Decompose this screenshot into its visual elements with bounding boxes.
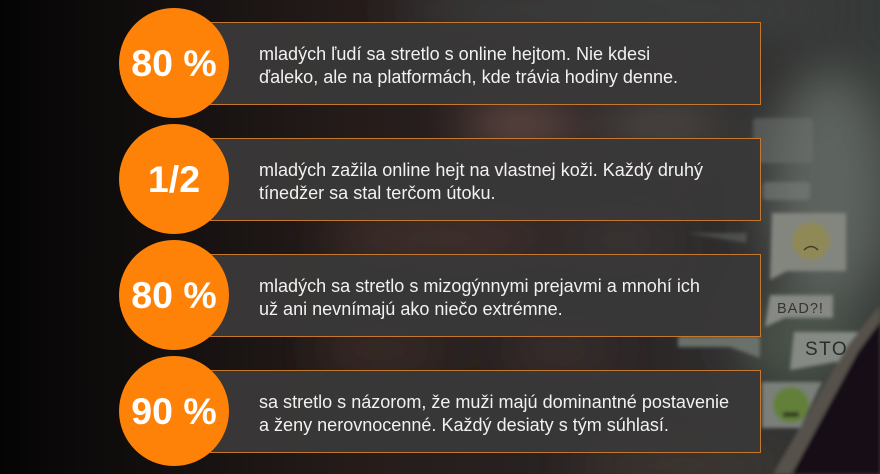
bubble text: BAD?! <box>777 301 824 317</box>
text: statement 3: už ani nevnímajú ako niečo extrémne. <box>259 299 563 319</box>
row 2 <box>119 124 761 234</box>
stat circle: 80 % <box>119 8 229 118</box>
text: statement 2: tínedžer sa stal terčom útoku. <box>259 183 496 203</box>
bubble text <box>777 301 848 360</box>
panel: statement 2 <box>210 138 761 221</box>
chat bubbles <box>753 118 813 163</box>
stat circle: 1/2 <box>119 124 229 234</box>
row 3 <box>119 240 761 350</box>
stat circle: 80 % <box>119 240 229 350</box>
panel: statement 4 <box>210 370 761 453</box>
text: statement 1 <box>259 44 678 87</box>
text: statement 3: mladých sa stretlo s mizogýnnymi prejavmi a mnohí ich <box>259 276 700 296</box>
stat circle: 1/2: 1/2 <box>148 158 200 200</box>
text: statement 3 <box>259 276 700 319</box>
text: statement 2 <box>259 160 703 203</box>
stat circle: 80 %: 80 % <box>131 274 217 316</box>
text: statement 4 <box>259 392 729 435</box>
phone edge <box>773 305 880 474</box>
text: statement 1: ďaleko, ale na platformách, kde trávia hodiny denne. <box>259 67 678 87</box>
text: statement 1: mladých ľudí sa stretlo s online hejtom. Nie kdesi <box>259 44 650 64</box>
panel: statement 3 <box>210 254 761 337</box>
stat circle: 80 %: 80 % <box>131 42 217 84</box>
row 4 <box>119 356 761 466</box>
bubble text: STO <box>805 339 848 360</box>
text: statement 4: a ženy nerovnocenné. Každý desiaty s tým súhlasí. <box>259 415 669 435</box>
stat circle: 90 % <box>119 356 229 466</box>
panel: statement 1 <box>210 22 761 105</box>
stat circle: 90 %: 90 % <box>131 390 217 432</box>
text: statement 2: mladých zažila online hejt na vlastnej koži. Každý druhý <box>259 160 703 180</box>
row 1 <box>119 8 761 118</box>
text: statement 4: sa stretlo s názorom, že muži majú dominantné postavenie <box>259 392 729 412</box>
